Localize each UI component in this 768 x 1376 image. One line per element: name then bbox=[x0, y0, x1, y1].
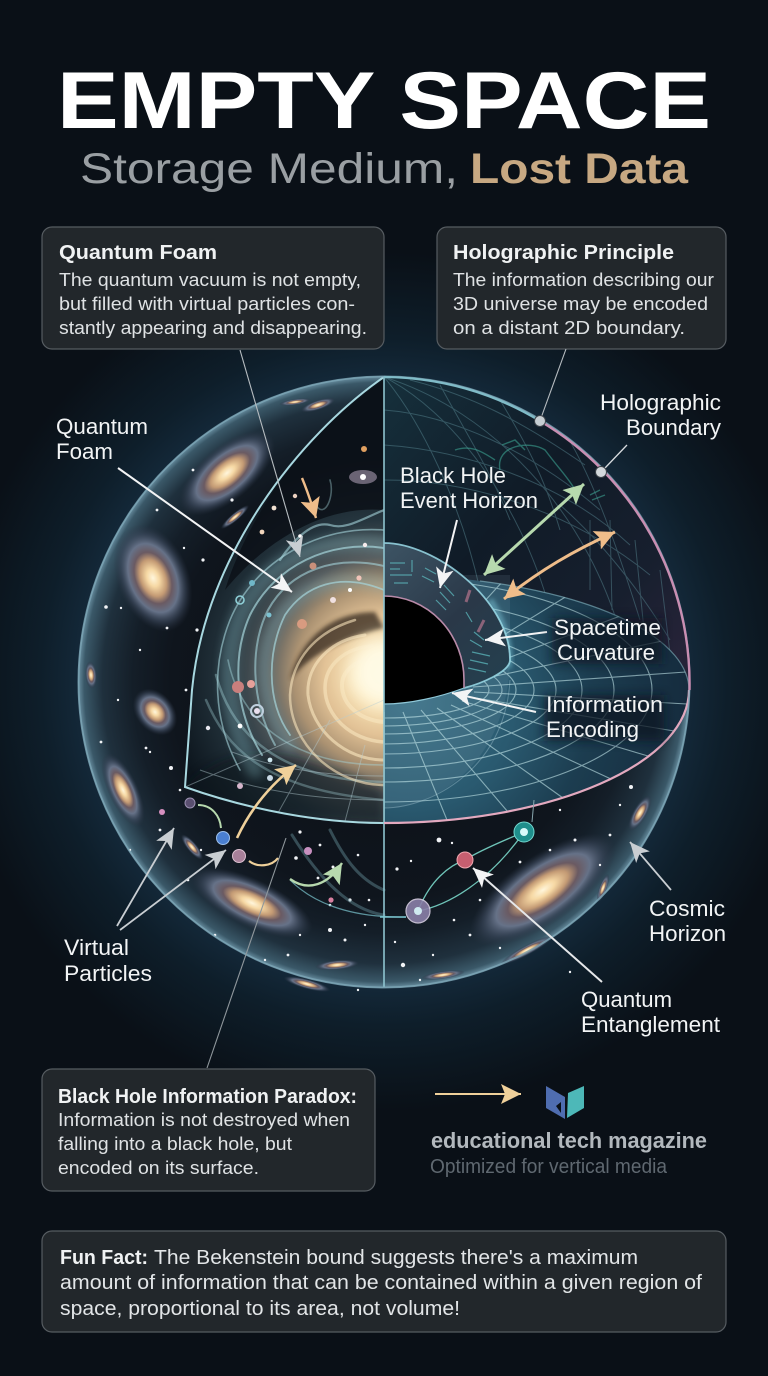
label: black hole event horizon: Black Hole bbox=[400, 463, 506, 488]
arrow: event horizon bbox=[440, 520, 457, 588]
label: cosmic horizon: Cosmic bbox=[649, 896, 725, 921]
floor bowl overlay bbox=[384, 575, 510, 808]
floor bowl edge bbox=[384, 680, 510, 808]
funnel dome bbox=[384, 543, 510, 688]
quantum foam heading: Quantum Foam bbox=[59, 242, 217, 264]
quantum foam body: but filled with virtual particles con- bbox=[59, 293, 355, 314]
arrow: cosmic horizon bbox=[630, 842, 671, 890]
green double arrow bbox=[484, 484, 584, 575]
cream spiral strands bbox=[290, 620, 384, 785]
central divider bbox=[383, 377, 385, 987]
black hole bbox=[384, 596, 464, 704]
paradox heading: Black Hole Information Paradox: bbox=[58, 1086, 357, 1108]
small green arc bbox=[198, 805, 221, 828]
holographic principle body: on a distant 2D boundary. bbox=[453, 317, 685, 338]
panel: black hole information paradox bbox=[42, 1069, 375, 1191]
lower right stars bbox=[394, 785, 633, 981]
thin leader to paradox panel bbox=[207, 838, 286, 1068]
label: holographic boundary: Boundary bbox=[626, 415, 721, 440]
holographic principle heading: Holographic Principle bbox=[453, 242, 674, 264]
lower right space galaxies bbox=[421, 792, 656, 982]
label: quantum foam: Quantum bbox=[56, 414, 148, 439]
sphere illustration bbox=[78, 370, 690, 995]
teal spiral strands bbox=[206, 480, 384, 800]
arrow: information encoding bbox=[452, 693, 536, 712]
dome rim bbox=[384, 543, 510, 688]
holographic principle body: 3D universe may be encoded bbox=[453, 293, 708, 314]
arrow: entanglement bbox=[473, 868, 602, 982]
wedge outline bbox=[185, 377, 384, 823]
funnel glow bbox=[490, 600, 509, 668]
label: cosmic horizon: Horizon bbox=[649, 921, 726, 946]
wedge particles bbox=[206, 446, 377, 789]
subtitle: Storage Medium, bbox=[80, 145, 458, 193]
label: virtual particles: Virtual bbox=[64, 935, 129, 960]
panel: holographic principle bbox=[437, 227, 726, 349]
quantum entanglement network bbox=[380, 800, 534, 923]
label: quantum entanglement: Quantum bbox=[581, 987, 672, 1012]
pink boundary rim bbox=[540, 421, 690, 690]
brand tagline: Optimized for vertical media bbox=[430, 1156, 668, 1178]
dark lower wedge shade bbox=[217, 750, 383, 822]
title: EMPTY SPACE bbox=[57, 56, 711, 146]
arrow: virtual particle inner bbox=[120, 850, 226, 930]
wall holographic traces bbox=[455, 440, 605, 500]
floor grid lines bbox=[384, 584, 686, 822]
paradox body: falling into a black hole, but bbox=[58, 1133, 292, 1154]
panel: quantum foam bbox=[42, 227, 384, 349]
fun fact text: The Bekenstein bound suggests there's a maximum bbox=[154, 1247, 638, 1269]
label: quantum entanglement: Entanglement bbox=[581, 1012, 720, 1037]
label: holographic boundary: Holographic bbox=[600, 390, 721, 415]
soft teal bands bbox=[229, 543, 384, 770]
left shell stars bbox=[100, 469, 370, 991]
label: information encoding: Encoding bbox=[546, 717, 639, 742]
fun fact text: amount of information that can be contained within a given region of bbox=[60, 1272, 702, 1294]
lower left teal streaks bbox=[292, 830, 384, 915]
left shell galaxies bbox=[84, 395, 359, 995]
wedge floor lines bbox=[185, 700, 384, 825]
leader to quantum foam wedge bbox=[240, 350, 300, 557]
right upper wall bbox=[384, 377, 689, 823]
wedge core glow bbox=[342, 626, 383, 714]
dome pink marks bbox=[466, 590, 484, 632]
sphere rim bbox=[78, 376, 690, 988]
orange inflow arrow bbox=[302, 478, 316, 518]
wall grid bbox=[384, 377, 672, 670]
teal top rim bbox=[384, 377, 540, 421]
panel: fun fact bbox=[42, 1231, 726, 1332]
dark brown spiral band bbox=[290, 612, 384, 680]
floor grid base bbox=[384, 575, 689, 823]
arrow: quantum foam bbox=[118, 468, 292, 592]
floor back edge bbox=[480, 581, 689, 690]
virtual particle pair bbox=[159, 798, 334, 903]
left floor equator tail bbox=[290, 880, 406, 917]
dark halo behind floor labels bbox=[544, 618, 664, 741]
subtitle: Lost Data bbox=[470, 145, 689, 193]
label: spacetime curvature: Spacetime bbox=[554, 615, 661, 640]
label: spacetime curvature: Curvature bbox=[557, 640, 655, 665]
orange double arrow bbox=[504, 532, 615, 599]
black hole rim bbox=[384, 596, 464, 688]
node: holographic boundary bbox=[596, 466, 606, 478]
label: information encoding: Information bbox=[546, 692, 663, 717]
dome data glyphs bbox=[390, 560, 490, 672]
dark upper band bbox=[225, 466, 383, 590]
fun fact text: space, proportional to its area, not volume! bbox=[60, 1298, 460, 1320]
icon: book logo bbox=[546, 1086, 584, 1119]
paradox body: Information is not destroyed when bbox=[58, 1109, 350, 1130]
leader: holographic boundary bbox=[605, 445, 627, 468]
left interior wedge bbox=[186, 378, 384, 822]
leader: holographic principle bbox=[541, 349, 566, 418]
sphere shell bbox=[78, 376, 690, 988]
holographic principle body: The information describing our bbox=[453, 269, 714, 290]
quantum foam body: The quantum vacuum is not empty, bbox=[59, 269, 361, 290]
wedge background bbox=[180, 370, 384, 830]
hole lower rim bbox=[384, 688, 464, 704]
label: black hole event horizon: Event Horizon bbox=[400, 488, 538, 513]
arrow: spacetime curvature bbox=[485, 632, 547, 640]
arrow: virtual particle outer bbox=[117, 828, 174, 926]
pink equator arc bbox=[384, 690, 689, 823]
small tan arc bbox=[249, 858, 278, 865]
quantum foam body: stantly appearing and disappearing. bbox=[59, 317, 367, 338]
green arc arrow bbox=[290, 863, 342, 886]
label: virtual particles: Particles bbox=[64, 961, 152, 986]
cream outflow arrow bbox=[237, 765, 296, 838]
node: holographic principle bbox=[534, 416, 546, 426]
paradox body: encoded on its surface. bbox=[58, 1157, 259, 1178]
label: quantum foam: Foam bbox=[56, 439, 113, 464]
fun fact text: Fun Fact: bbox=[60, 1247, 148, 1269]
arrow: to logo bbox=[435, 1093, 521, 1095]
brand name: educational tech magazine bbox=[431, 1128, 707, 1153]
